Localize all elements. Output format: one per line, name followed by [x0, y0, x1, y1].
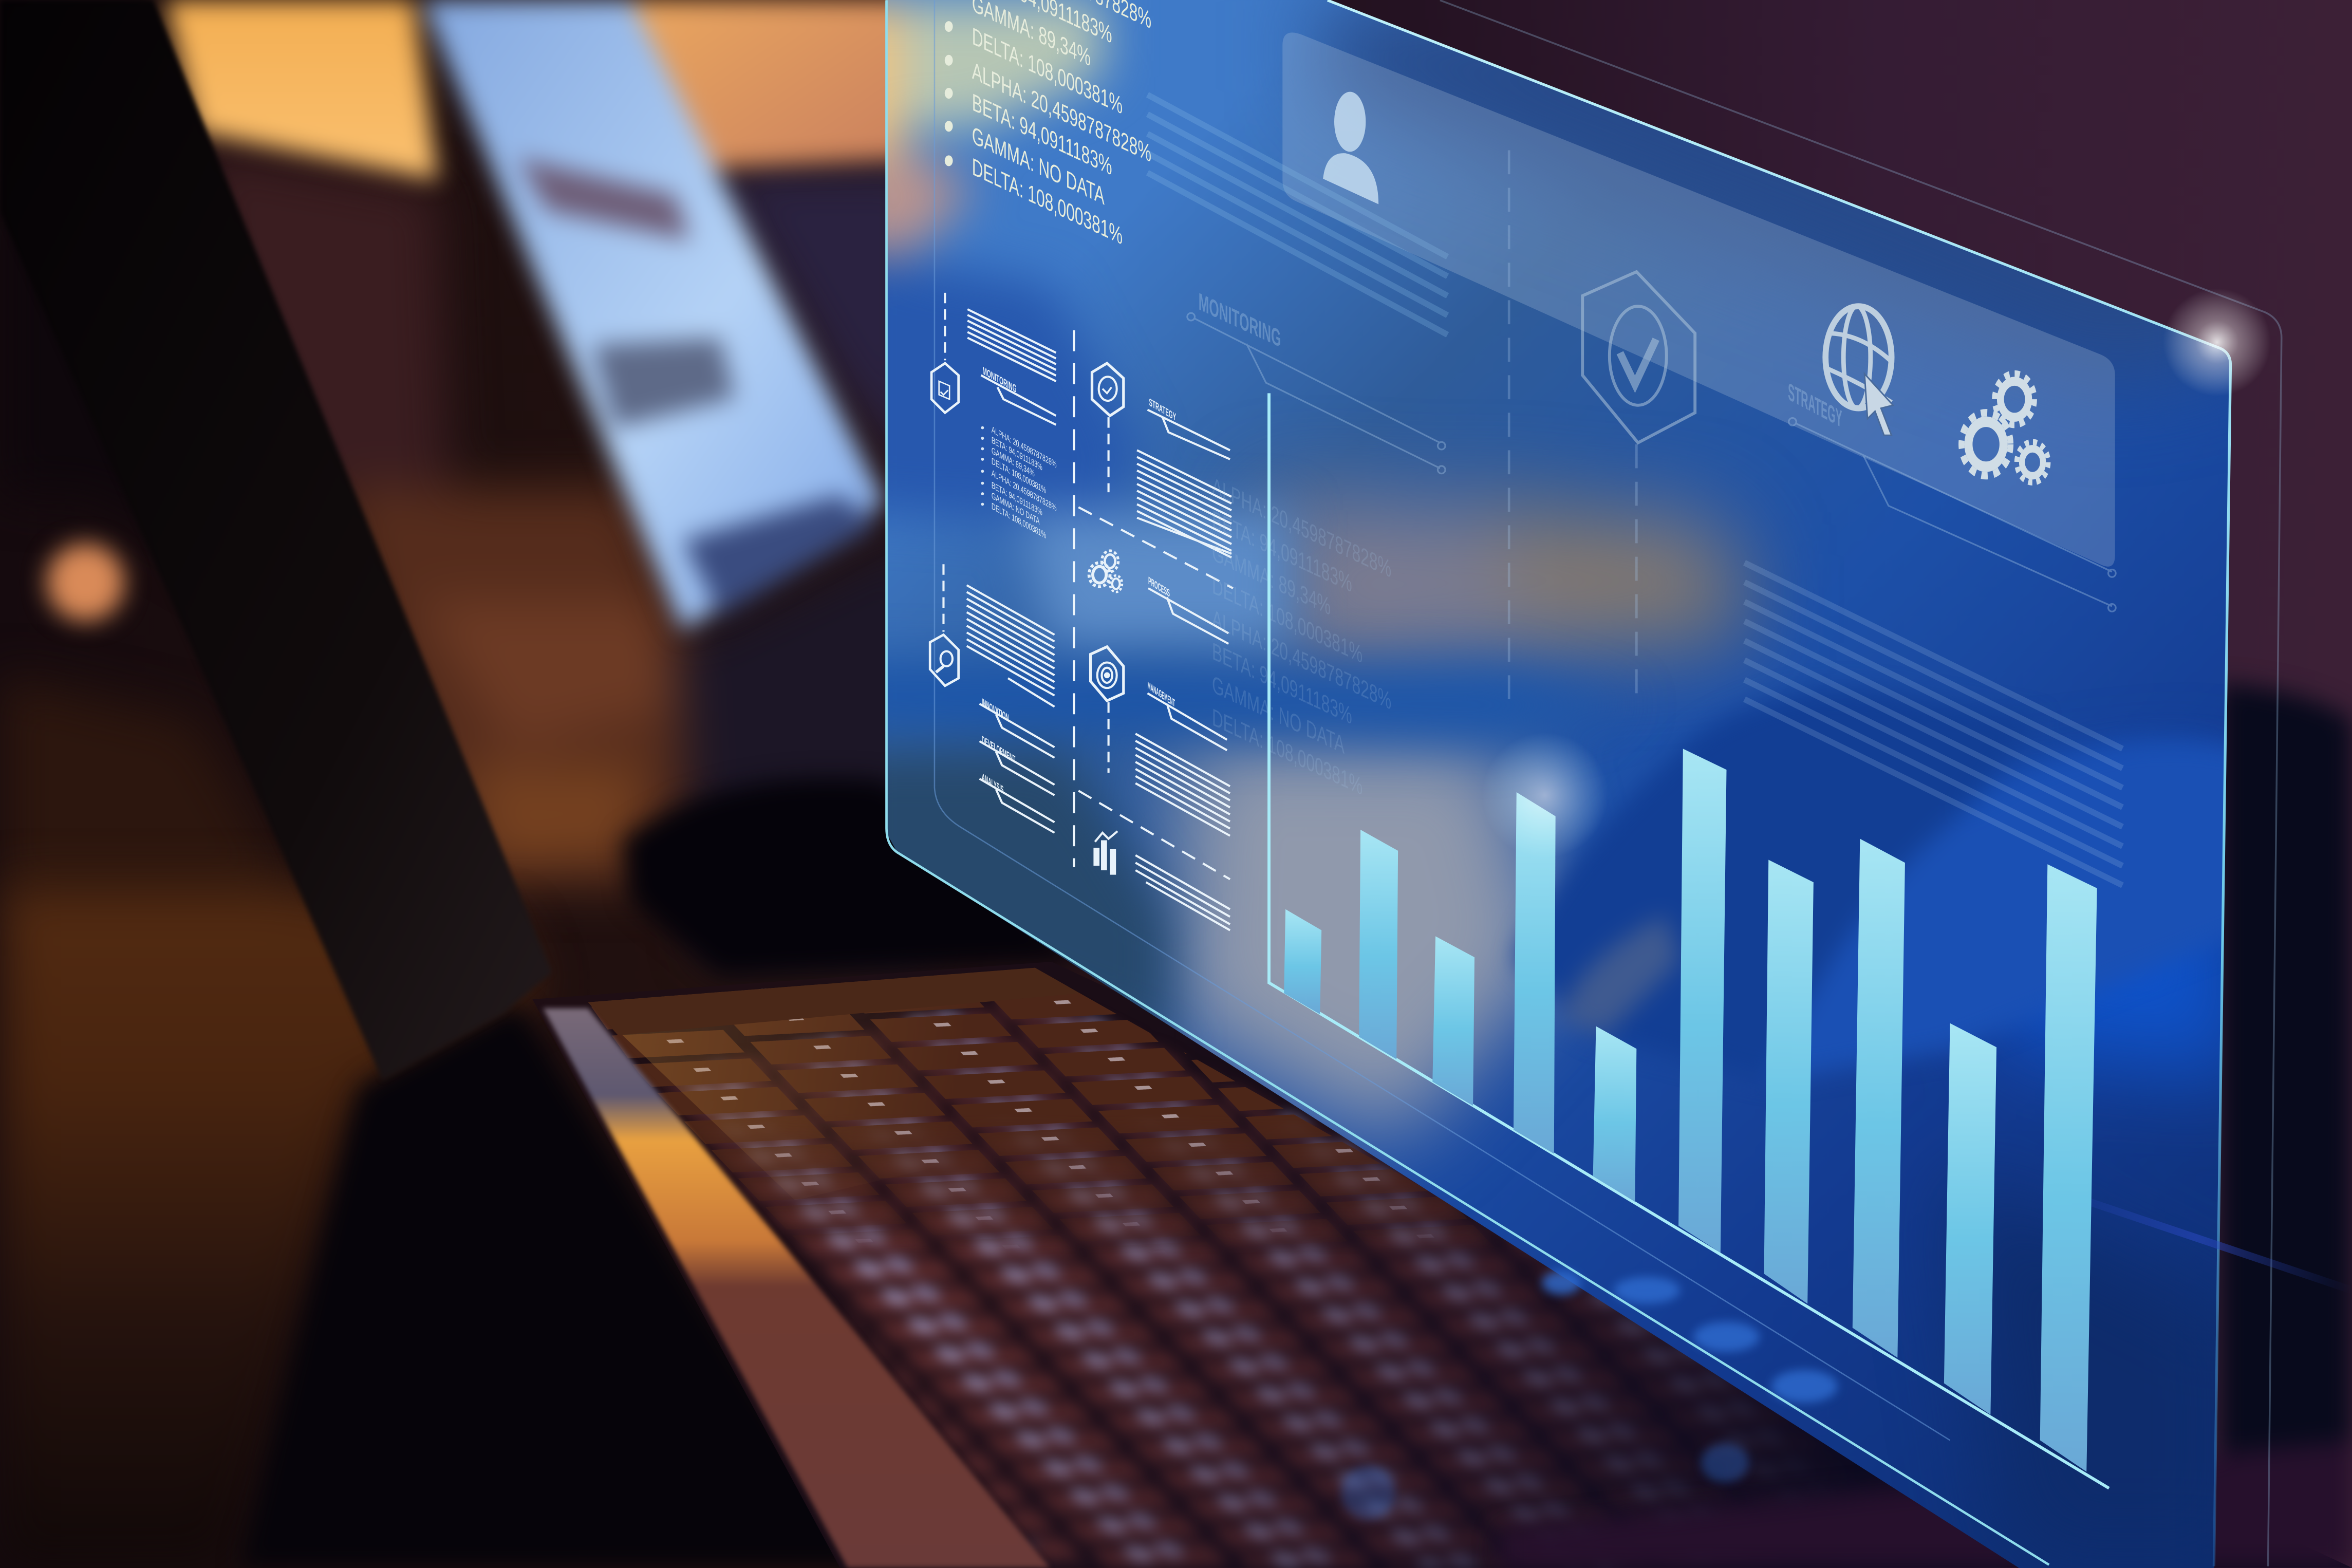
data list lines: GAMMA: NO DATA — [972, 121, 1105, 210]
label: strategy — [1148, 396, 1230, 459]
bars — [1284, 749, 2097, 1472]
small data list: BETA: 94,0911183% — [992, 435, 1042, 473]
faint stripes right — [1745, 563, 2122, 885]
label: development — [980, 734, 1055, 795]
faint mirrored data list: ALPHA: 20,4598787828% — [1212, 604, 1391, 715]
dashed connector — [944, 293, 945, 360]
data list lines: DELTA: 108,000381% — [972, 152, 1123, 250]
icon: magnifier hexagon — [930, 634, 959, 686]
faint vertical dashes — [1509, 150, 1636, 705]
faint strategy label — [1788, 378, 2116, 611]
corner glare — [2163, 288, 2271, 396]
small data list: GAMMA: NO DATA — [992, 491, 1040, 527]
data list lines: DELTA: 108,000381% — [972, 22, 1123, 120]
faint monitoring bracket: MONITORING — [1199, 288, 1281, 353]
rear glass frame — [1440, 0, 2282, 1566]
striped block — [967, 309, 1056, 381]
outer glass edge — [887, 0, 2049, 1565]
icon: gears — [1089, 551, 1122, 592]
dashed connector — [943, 564, 944, 632]
faint mirrored data list — [1212, 472, 1391, 800]
data list lines — [972, 0, 1151, 250]
data list lines: BETA: 94,0911183% — [972, 88, 1112, 181]
faint mirrored data list: GAMMA: 89,34% — [1212, 538, 1331, 621]
striped block — [1137, 450, 1231, 557]
data list — [945, 0, 1151, 250]
label: innovation: INNOVATION — [982, 696, 1009, 724]
out of focus keys — [661, 1001, 1992, 1568]
hinge band — [588, 968, 1080, 1035]
faint monitoring bracket — [1187, 288, 1445, 474]
data list lines: ALPHA: 20,4598787828% — [972, 57, 1151, 167]
icon: large check hexagon — [1582, 272, 1695, 443]
centre divider — [1073, 330, 1074, 867]
user icon — [1323, 92, 1378, 204]
faint mirrored data list: DELTA: 108,000381% — [1212, 571, 1362, 668]
label: innovation — [980, 696, 1055, 758]
striped block — [967, 585, 1055, 707]
bar glow — [1482, 732, 1608, 858]
small data list: DELTA: 108,000381% — [992, 456, 1046, 496]
label: development: DEVELOPMENT — [982, 734, 1015, 766]
label: analysis — [980, 771, 1055, 833]
icon: globe with cursor — [1825, 306, 1893, 435]
small gear — [2017, 442, 2048, 482]
label: process: PROCESS — [1148, 574, 1170, 600]
label: process — [1148, 574, 1228, 644]
icon: gears — [1962, 374, 2048, 482]
data list bullets — [945, 21, 953, 166]
light streak — [2040, 1185, 2352, 1290]
icon: clipboard hexagon — [931, 363, 959, 413]
large gear — [1962, 413, 2010, 476]
icon: check hexagon — [1092, 363, 1124, 416]
upper gear — [1994, 374, 2034, 425]
small data list: GAMMA: 89,34% — [992, 445, 1035, 479]
dashed divider — [1078, 791, 1230, 879]
faint mirrored data list: GAMMA: NO DATA — [1212, 670, 1345, 759]
striped block — [1135, 734, 1230, 836]
dashed connector — [1108, 417, 1109, 492]
bar chart — [1269, 393, 2109, 1488]
dashed connector — [1108, 702, 1109, 773]
faint mirrored data list: ALPHA: 20,4598787828% — [1212, 472, 1391, 583]
faint mirrored data list: DELTA: 108,000381% — [1212, 703, 1362, 800]
label: monitoring: MONITORING — [982, 364, 1017, 395]
dashed divider — [1078, 507, 1233, 588]
faint mirrored data list: BETA: 94,0911183% — [1212, 505, 1352, 598]
sharp keys near the hinge — [588, 968, 1467, 1242]
small data list: BETA: 94,0911183% — [992, 480, 1042, 518]
striped block — [1135, 855, 1230, 930]
small data list: ALPHA: 20,4598787828% — [992, 468, 1057, 514]
inner glass outline — [935, 0, 1950, 1440]
faint stripes beside user — [1148, 95, 1447, 335]
small data list — [981, 424, 1057, 541]
icon: target hexagon — [1091, 647, 1124, 701]
right column — [1078, 363, 1233, 930]
axis and baseline — [1269, 393, 2109, 1488]
faint mirrored data list: BETA: 94,0911183% — [1212, 637, 1352, 730]
label: management: MANAGEMENT — [1148, 680, 1175, 710]
label: management — [1148, 680, 1227, 750]
small data list: ALPHA: 20,4598787828% — [992, 424, 1057, 470]
left column: innovation, development, analysis — [930, 564, 1055, 833]
label: monitoring — [981, 364, 1056, 425]
top and right edge — [1328, 0, 2231, 1566]
label: strategy: STRATEGY — [1149, 396, 1176, 423]
icon: bar chart with trend line — [1093, 831, 1117, 875]
label: analysis: ANALYSIS — [982, 771, 1004, 796]
left column: monitoring — [931, 293, 1057, 541]
faint strategy label: STRATEGY — [1788, 378, 1842, 433]
small data list: DELTA: 108,000381% — [992, 501, 1046, 541]
